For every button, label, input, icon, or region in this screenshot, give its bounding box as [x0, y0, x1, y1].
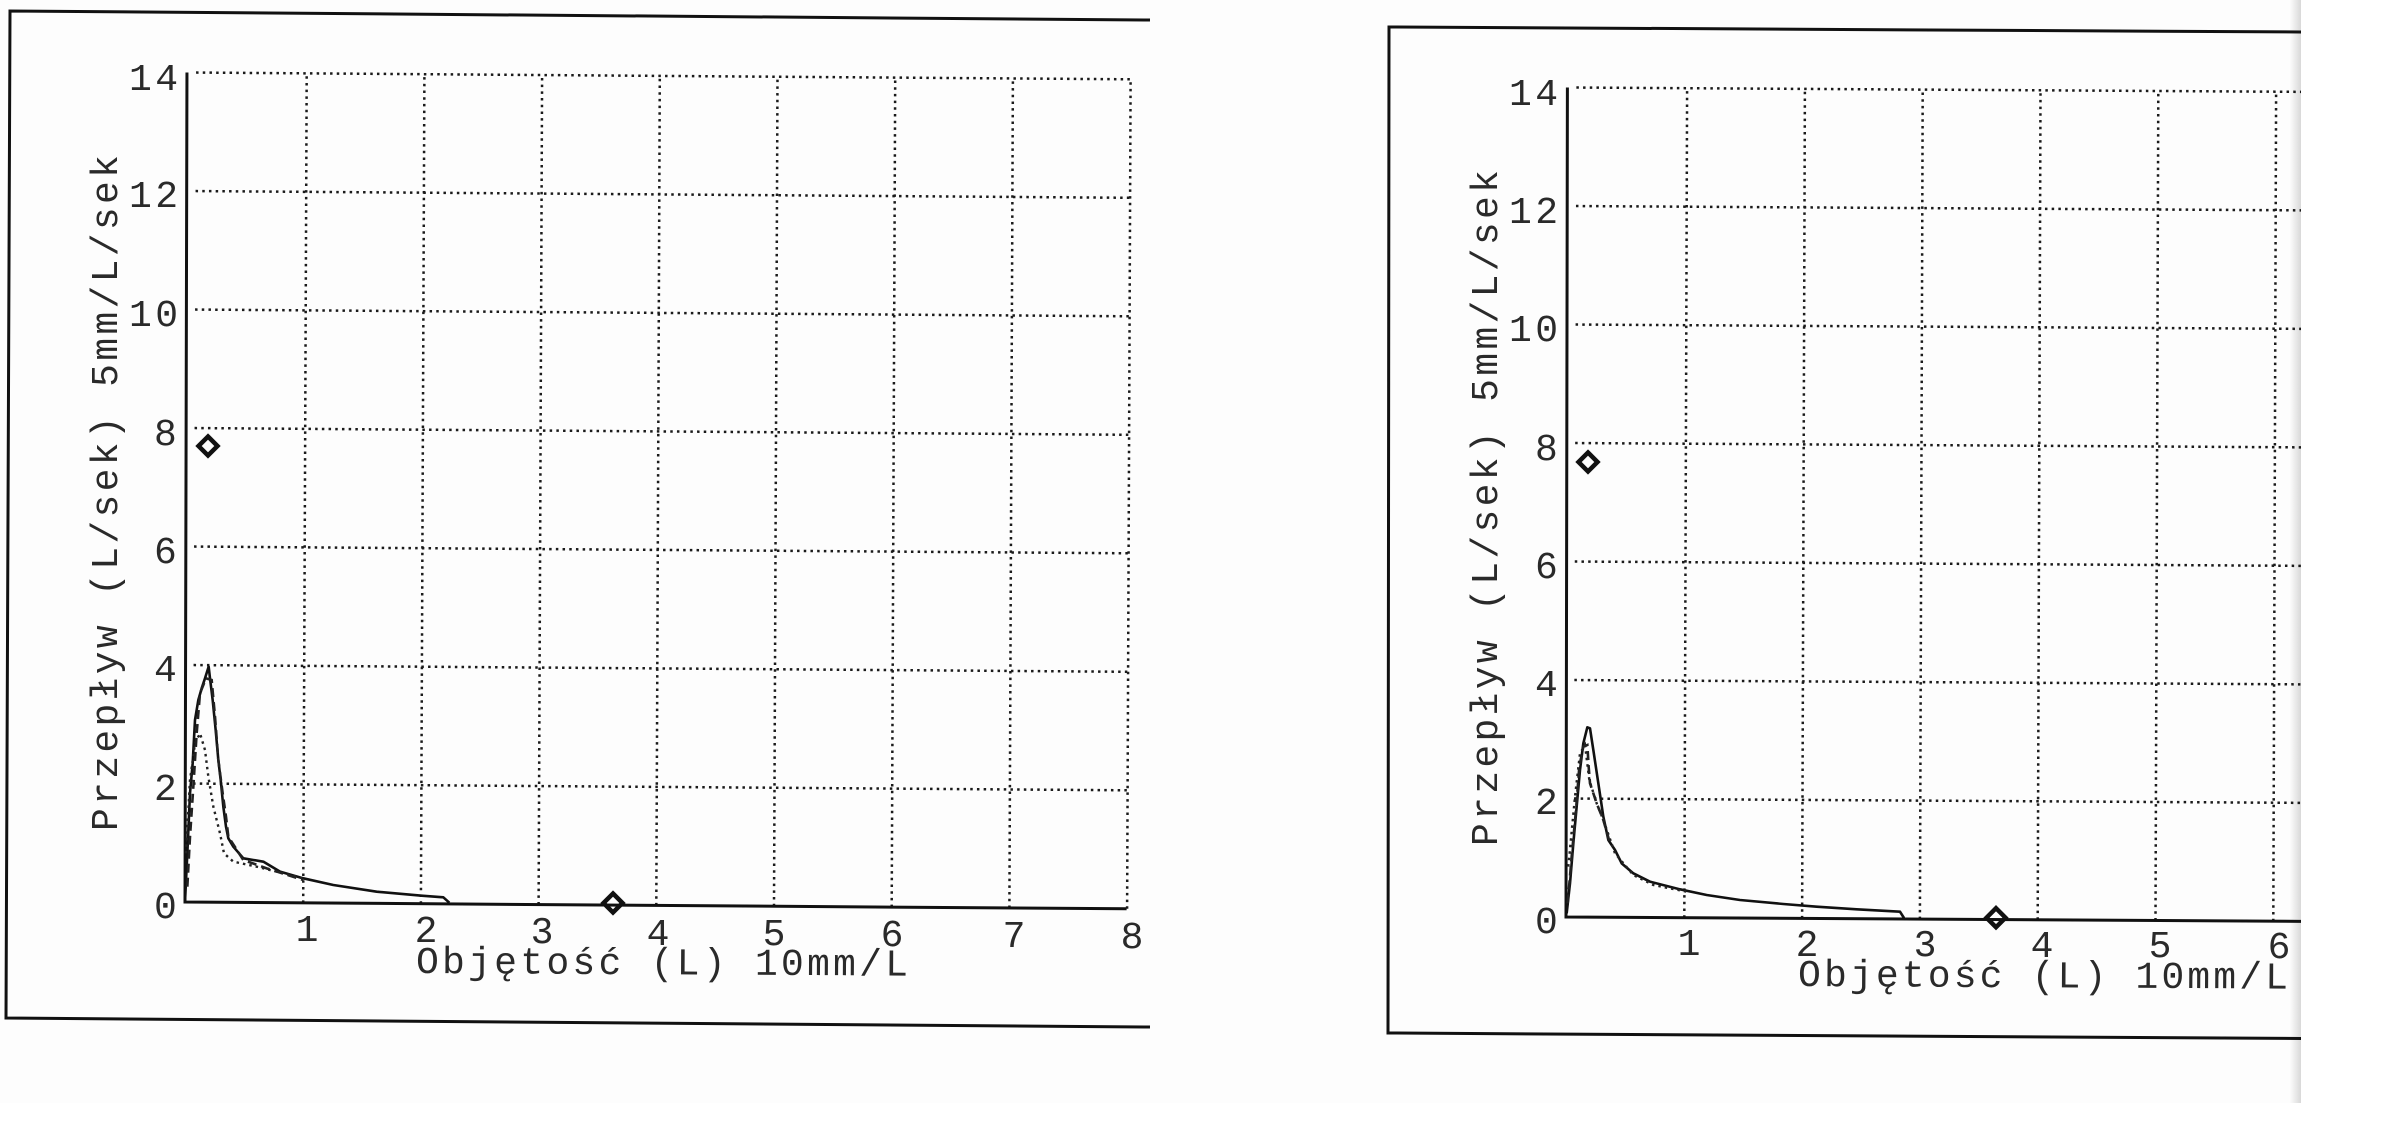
left y-axis tick labels: 12 [129, 176, 178, 219]
right y-axis tick labels: 10 [1509, 310, 1558, 353]
left x-axis tick labels: 1 [296, 910, 318, 953]
left y-axis tick labels: 4 [154, 650, 177, 693]
left y-axis tick labels: 6 [154, 532, 177, 575]
left chart frame [6, 11, 1150, 1027]
left x-axis tick labels: 4 [647, 914, 669, 957]
right marker: upper diamond [1578, 452, 1598, 472]
right y-axis tick labels: 6 [1535, 547, 1558, 590]
left x-axis tick labels: 6 [881, 915, 903, 958]
left x-axis tick labels: 5 [763, 914, 785, 957]
left marker: upper diamond [198, 436, 218, 456]
left y-axis tick labels: 2 [154, 769, 177, 812]
panel: right flow-volume chart [1388, 27, 2311, 1038]
right chart axes [1566, 88, 2310, 921]
right x-axis tick labels: 2 [1796, 925, 1818, 968]
right y-axis tick labels: 4 [1535, 665, 1558, 708]
left x-axis tick labels: 7 [1003, 916, 1025, 959]
right y-axis title: Przepływ (L/sek) 5mm/L/sek [1466, 170, 1509, 846]
left y-axis tick labels: 8 [154, 414, 177, 457]
left x-axis tick labels: 2 [415, 911, 437, 954]
right x-axis tick labels: 5 [2149, 926, 2171, 969]
left x-axis tick labels: 8 [1121, 917, 1143, 960]
right marker: lower diamond [1986, 908, 2006, 927]
right x-axis tick labels [1680, 930, 2288, 958]
right y-axis tick labels: 12 [1509, 192, 1558, 235]
right x-axis title: Objętość (L) 10mm/L [1798, 955, 2288, 1001]
left y-axis tick labels: 10 [129, 295, 178, 338]
right x-axis tick labels: 1 [1678, 924, 1700, 967]
left x-axis tick labels [296, 910, 1143, 960]
left y-axis tick labels: 14 [129, 59, 178, 102]
right x-axis tick labels: 6 [2268, 927, 2290, 970]
right y-axis tick labels: 14 [1509, 74, 1558, 117]
right y-axis tick labels: 0 [1535, 902, 1558, 945]
right chart grid [1574, 88, 2311, 921]
left y-axis title: Przepływ (L/sek) 5mm/L/sek [86, 155, 129, 831]
right flow curves [1567, 727, 1904, 918]
left chart axes [185, 72, 1129, 909]
left flow curves [185, 667, 449, 903]
left x-axis title: Objętość (L) 10mm/L [416, 942, 908, 988]
left y-axis tick labels [129, 59, 178, 930]
left y-axis tick labels: 0 [154, 887, 177, 930]
right y-axis tick labels [1512, 80, 1556, 934]
left x-axis tick labels: 3 [531, 912, 553, 955]
right y-axis tick labels: 8 [1535, 429, 1558, 472]
right chart frame [1388, 27, 2301, 1038]
left chart grid [193, 73, 1131, 909]
right x-axis tick labels: 4 [2031, 926, 2053, 969]
panel: left flow-volume chart [6, 11, 1150, 1027]
left marker: lower diamond [604, 894, 622, 912]
right x-axis tick labels: 3 [1914, 925, 1936, 968]
right y-axis tick labels: 2 [1535, 783, 1558, 826]
